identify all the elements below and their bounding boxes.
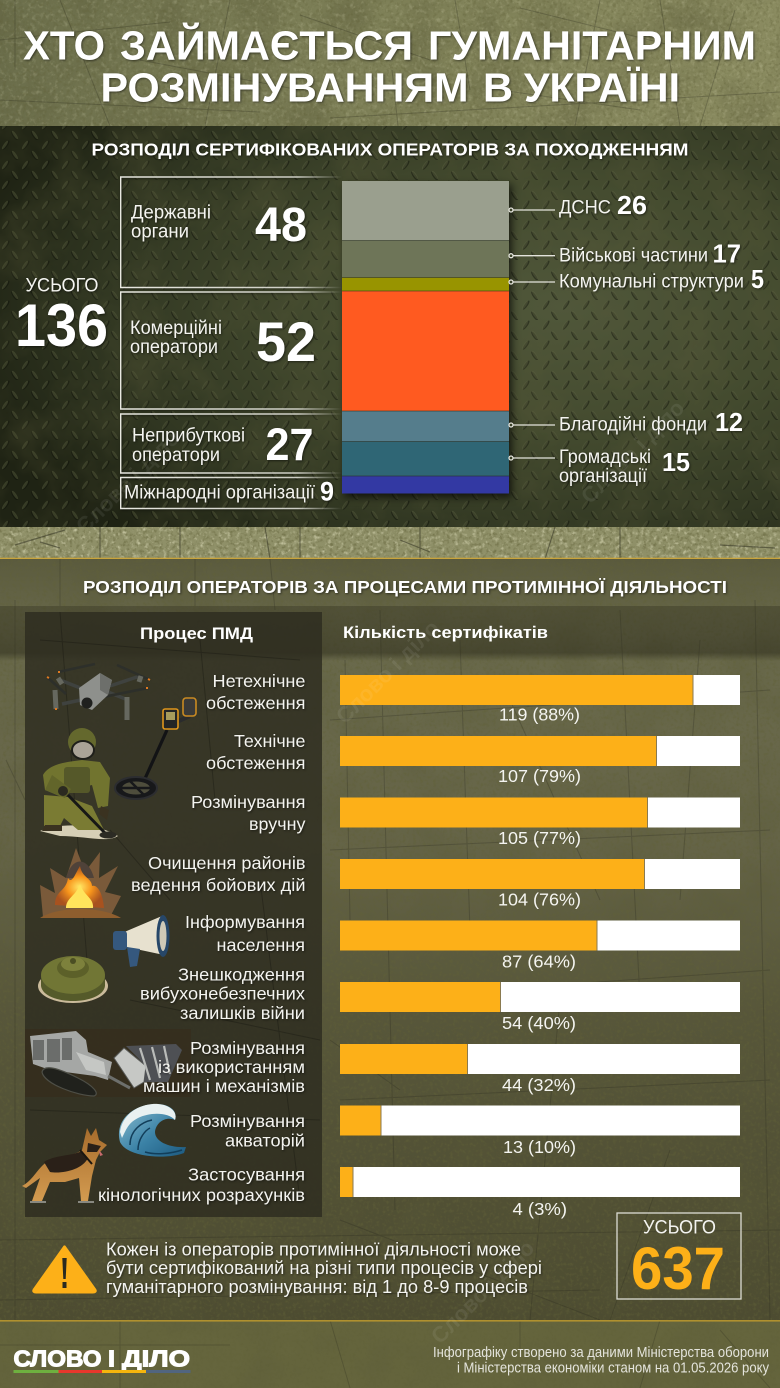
- bar: technical survey 107: 107 (79%): [498, 766, 581, 786]
- label: military units 17: 17: [712, 238, 741, 268]
- group box: state bodies 48: Державні: [131, 202, 211, 224]
- bar: non-technical survey 119: [340, 675, 740, 724]
- label: charities 12: [559, 407, 743, 437]
- process labels: [98, 671, 306, 1205]
- label: civic organizations 15: [559, 446, 690, 487]
- label: canine teams: [98, 1164, 305, 1205]
- label: informing population: населення: [216, 935, 305, 955]
- title: ХТО: [23, 22, 105, 68]
- watermarks: Слово і діло: [71, 425, 184, 539]
- background: top textured header band: [0, 0, 780, 127]
- panel: operators by origin: [0, 126, 780, 539]
- bar: mechanical demining 44: 44 (32%): [502, 1075, 576, 1095]
- label: canine teams: Застосування: [188, 1164, 305, 1184]
- heading: origin distribution: РОЗПОДІЛ СЕРТИФІКОВАНИХ ОПЕРАТОРІВ ЗА ПОХОДЖЕННЯМ: [92, 140, 688, 160]
- group box: non-profit operators 27: 27: [266, 419, 314, 470]
- logo: ДІЛО: [122, 1346, 190, 1372]
- footer background: [0, 1320, 780, 1388]
- logo: [14, 1346, 190, 1373]
- note text: бути сертифікований на різні типи процесів у сфері: [106, 1258, 542, 1278]
- logo: СЛОВО: [14, 1346, 102, 1372]
- background: light divider band: [0, 527, 780, 559]
- bar: underwater demining 13: 13 (10%): [503, 1137, 576, 1157]
- icon: warning triangle: [34, 1247, 95, 1292]
- bar: non-technical survey 119: 119 (88%): [499, 704, 580, 724]
- label: DSNS 26: 26: [617, 190, 647, 220]
- label: non-technical survey: Нетехнічне: [212, 671, 306, 691]
- label: DSNS 26: ДСНС: [559, 196, 611, 218]
- icon: anti-tank mine: [38, 956, 108, 1003]
- group box: commercial operators 52: Комерційні: [130, 317, 222, 339]
- icon: drone: [47, 664, 150, 720]
- icon: megaphone: [113, 915, 170, 967]
- label: mechanical demining: Розмінування: [190, 1038, 305, 1058]
- total box: 637: УСЬОГО: [643, 1218, 716, 1238]
- watermarks: [71, 395, 689, 539]
- bar: EOD 54: [340, 982, 740, 1033]
- label: informing population: Інформування: [185, 912, 305, 932]
- bar chart: certificates by process: [340, 675, 740, 1219]
- group box: state bodies 48: [120, 176, 342, 288]
- group box: international organizations 9: [120, 476, 342, 509]
- title: В: [483, 64, 513, 110]
- watermarks lower: Слово і діло: [426, 1235, 539, 1349]
- bar: manual demining 105: 105 (77%): [498, 828, 581, 848]
- label: underwater demining: [190, 1111, 305, 1150]
- group box: state bodies 48: 48: [255, 199, 307, 252]
- group box: non-profit operators 27: [120, 414, 342, 474]
- label: non-technical survey: [206, 671, 306, 713]
- label: charities 12: Благодійні фонди: [559, 414, 707, 436]
- title: РОЗМІНУВАННЯМ: [100, 64, 468, 110]
- icon: deminer soldier: [40, 728, 118, 839]
- label: military units 17: Військові частини: [559, 244, 708, 266]
- label: charities 12: 12: [715, 407, 743, 437]
- panel: processes background: [0, 559, 780, 1321]
- source note: [433, 1345, 770, 1376]
- total: 136: 136: [15, 292, 108, 359]
- bar: EOD 54: 54 (40%): [502, 1013, 576, 1033]
- total box: 637: 637: [631, 1235, 725, 1302]
- total: 136: УСЬОГО: [26, 276, 98, 296]
- bar: informing population 87: 87 (64%): [502, 952, 576, 972]
- column heading: certificates: Кількість сертифікатів: [343, 624, 548, 642]
- label: battle area clearance: Очищення районів: [148, 853, 306, 873]
- label: underwater demining: Розмінування: [190, 1111, 305, 1131]
- group box: commercial operators 52: оператори: [130, 336, 218, 358]
- icon: explosion: [40, 848, 121, 918]
- label: municipal structures 5: 5: [751, 264, 764, 294]
- label: manual demining: Розмінування: [191, 792, 306, 812]
- bar: mechanical demining 44: [340, 1044, 740, 1095]
- note text: гуманітарного розмінування: від 1 до 8-9 процесів: [106, 1277, 528, 1297]
- title: УКРАЇНІ: [524, 64, 680, 110]
- label: military units 17: [559, 238, 741, 268]
- group box: commercial operators 52: 52: [256, 310, 316, 373]
- group box: international organizations 9: Міжнародні організації: [124, 482, 316, 504]
- bar: canine teams 4: [340, 1167, 740, 1219]
- label: technical survey: Технічне: [234, 731, 306, 751]
- group box: commercial operators 52: [120, 292, 342, 410]
- watermarks: Слово і діло: [576, 395, 689, 509]
- note text: [106, 1240, 542, 1297]
- bar: battle area clearance 104: 104 (76%): [498, 890, 581, 910]
- label: non-technical survey: обстеження: [206, 693, 306, 713]
- label: canine teams: кінологічних розрахунків: [98, 1185, 305, 1205]
- label: informing population: [185, 912, 305, 955]
- label: civic organizations 15: 15: [662, 447, 690, 477]
- group box: international organizations 9: 9: [320, 476, 334, 506]
- label: battle area clearance: ведення бойових дій: [131, 875, 306, 895]
- label: manual demining: [191, 792, 306, 834]
- label: EOD: Знешкодження: [178, 964, 305, 984]
- bar: battle area clearance 104: [340, 859, 740, 910]
- label: EOD: залишків війни: [180, 1003, 305, 1023]
- connector lines: [509, 208, 555, 460]
- icon: demining machine: [25, 1029, 191, 1097]
- bar: informing population 87: [340, 920, 740, 972]
- bar: manual demining 105: [340, 798, 740, 848]
- label: technical survey: обстеження: [206, 753, 306, 773]
- label: battle area clearance: [131, 853, 306, 895]
- label: DSNS 26: [559, 190, 647, 220]
- label: EOD: вибухонебезпечних: [140, 984, 305, 1004]
- stacked bar chart: [342, 181, 509, 494]
- column heading: process: Процес ПМД: [140, 625, 253, 643]
- logo: І: [108, 1346, 115, 1372]
- bar: canine teams 4: 4 (3%): [512, 1199, 567, 1219]
- label: EOD: [140, 964, 305, 1023]
- label: manual demining: вручну: [249, 814, 306, 834]
- title: ЗАЙМАЄТЬСЯ: [120, 22, 413, 68]
- group box: state bodies 48: органи: [131, 220, 189, 242]
- label: technical survey: [206, 731, 306, 773]
- note text: Кожен із операторів протимінної діяльності може: [106, 1240, 521, 1260]
- watermarks lower: Слово і діло: [331, 615, 444, 729]
- title: [23, 22, 756, 110]
- heading: process distribution: РОЗПОДІЛ ОПЕРАТОРІВ ЗА ПРОЦЕСАМИ ПРОТИМІННОЇ ДІЯЛЬНОСТІ: [83, 577, 727, 597]
- icon: metal detector: [115, 698, 196, 799]
- total box: 637: [617, 1213, 741, 1302]
- label: underwater demining: акваторій: [225, 1130, 305, 1150]
- icon: german shepherd dog: [22, 1128, 107, 1202]
- watermarks lower: [331, 615, 539, 1349]
- group box: non-profit operators 27: оператори: [132, 444, 220, 466]
- label: civic organizations 15: організації: [559, 465, 648, 487]
- bar: technical survey 107: [340, 736, 740, 786]
- icon: wave: [119, 1104, 186, 1157]
- label: municipal structures 5: Комунальні структури: [559, 270, 744, 292]
- bar: underwater demining 13: [340, 1106, 740, 1157]
- group box: non-profit operators 27: Неприбуткові: [132, 424, 245, 446]
- title: ГУМАНІТАРНИМ: [428, 22, 756, 68]
- label: mechanical demining: машин і механізмів: [143, 1076, 305, 1096]
- label: mechanical demining: із використанням: [158, 1057, 305, 1077]
- label: mechanical demining: [143, 1038, 305, 1096]
- label: civic organizations 15: Громадські: [559, 446, 651, 468]
